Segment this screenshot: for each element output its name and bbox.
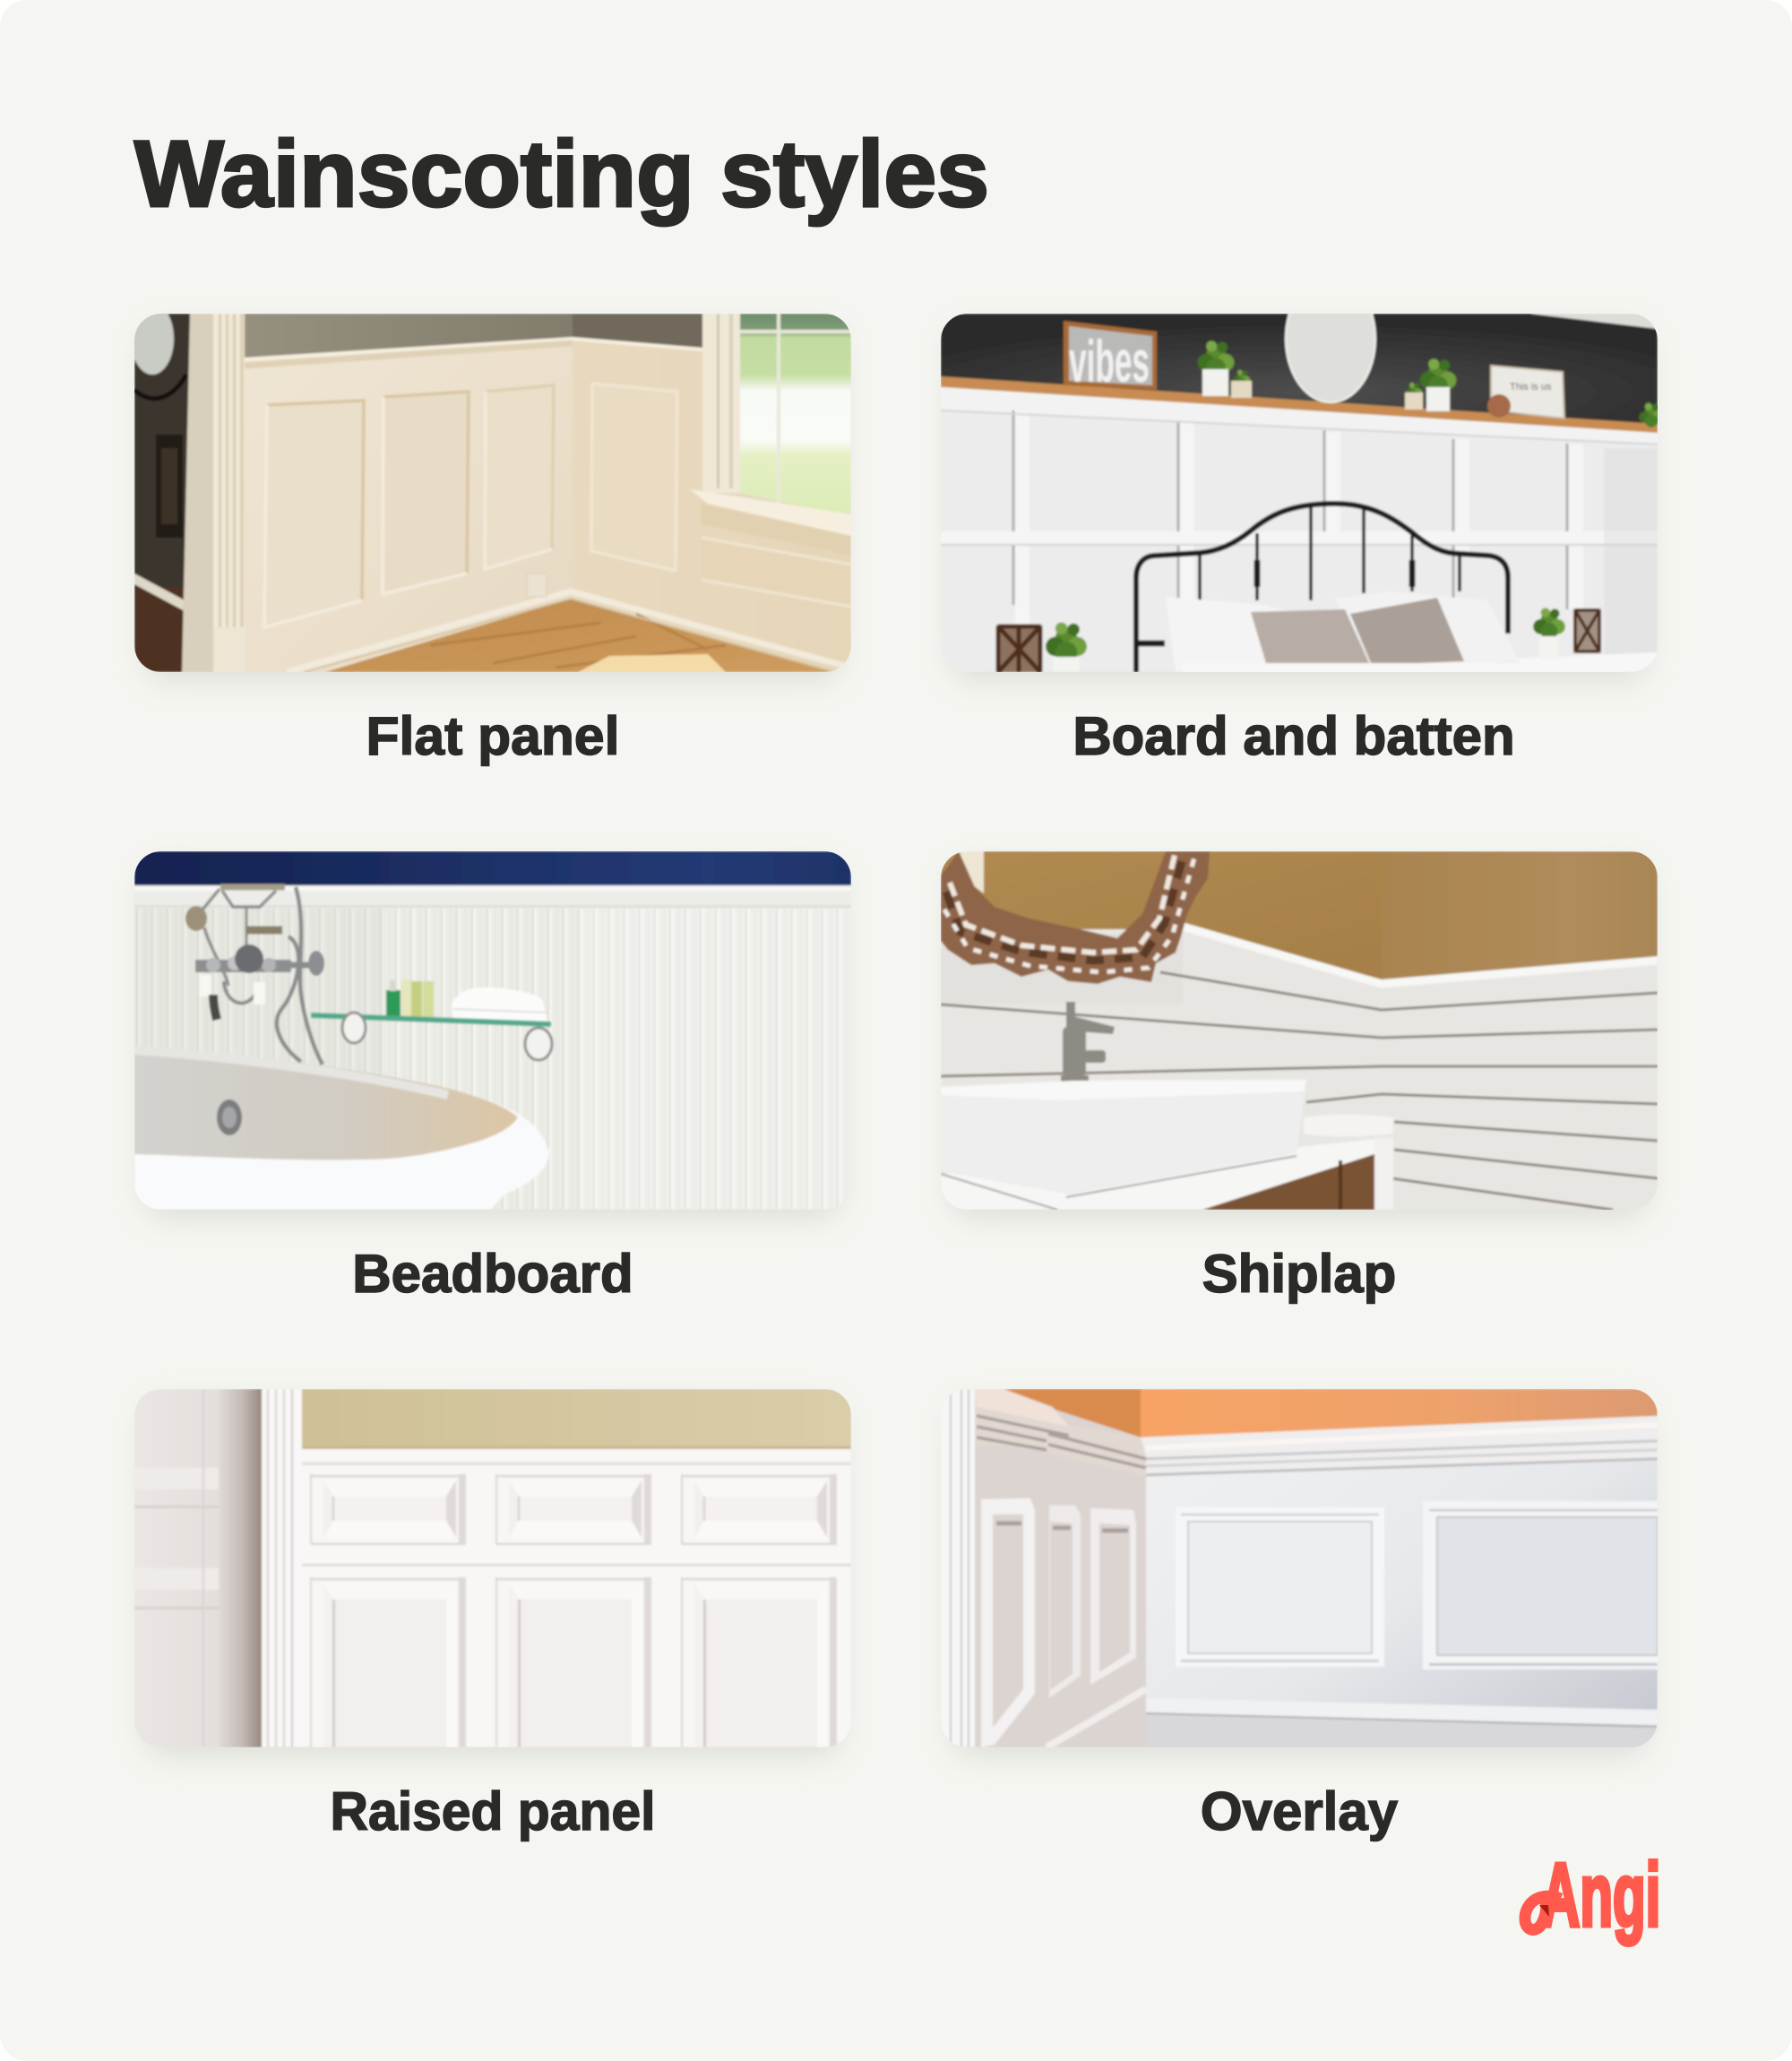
top wall band (943, 386, 1656, 434)
beadboard wall (134, 851, 851, 1210)
photo: flat panel wainscoting (131, 303, 851, 672)
batten grid (941, 409, 1658, 624)
cap rail (134, 885, 851, 909)
floor and baseboard (287, 591, 851, 672)
label: beadboard: Beadboard (352, 1244, 633, 1304)
photo: overlay wainscoting (941, 1389, 1665, 1751)
vibes sign (1064, 321, 1157, 394)
label: raised panel: Raised panel (330, 1781, 656, 1841)
toilet tank (1304, 1115, 1393, 1136)
label: board and batten: Board and batten (1073, 706, 1515, 766)
panel: flat panel (131, 303, 851, 766)
plants on shelf (1198, 341, 1664, 427)
framed sign: This is us (1510, 382, 1552, 392)
photo: beadboard wainscoting (134, 851, 851, 1210)
label: overlay: Overlay (1201, 1781, 1399, 1841)
white cap rail (1183, 927, 1658, 984)
glass shelf with toiletries (311, 979, 552, 1060)
label: shiplap: Shiplap (1202, 1244, 1396, 1304)
navy wall band (134, 851, 851, 885)
logo: Angi: Angi (1541, 1845, 1660, 1945)
faucet (185, 887, 324, 1065)
overlay panels, left wall (981, 1498, 1136, 1747)
lower rail, left wall (1047, 1689, 1146, 1747)
overlay panel A (1176, 1507, 1384, 1667)
lower rail (1146, 1698, 1658, 1751)
door shadow (219, 1389, 262, 1747)
recessed panels (264, 384, 851, 627)
nightstand, right lantern and plant (1514, 608, 1658, 672)
crown, left wall (975, 1389, 1146, 1476)
faucet (1061, 1002, 1115, 1083)
ornate mirror (941, 851, 1210, 984)
fluted casing (262, 1389, 302, 1747)
shiplap lines (941, 972, 1658, 1210)
overlay panel B (1423, 1501, 1665, 1669)
window (690, 314, 851, 556)
upper raised panels (310, 1474, 837, 1545)
orange upper wall (1004, 1389, 1658, 1437)
wall below mirror (941, 930, 1183, 1004)
pillar trim (182, 314, 245, 672)
panel: raised panel (134, 1389, 851, 1841)
panel: board and batten (941, 314, 1658, 756)
title: Wainscoting styles (134, 122, 989, 227)
vessel sink (941, 1080, 1306, 1210)
dark upper wall (941, 314, 1658, 426)
door (134, 1389, 219, 1747)
left wall (941, 1389, 1146, 1747)
chair rail (245, 339, 702, 366)
outlet (527, 573, 547, 597)
wooden shelf (941, 376, 1658, 433)
headboard (1136, 504, 1508, 672)
pillows (1176, 597, 1620, 672)
right shading (1605, 530, 1658, 543)
wall surfaces (245, 341, 851, 672)
left lantern and plant (996, 622, 1087, 672)
panel: shiplap (941, 851, 1658, 1304)
chair rail, right wall (1141, 1416, 1658, 1476)
photo: shiplap wainscoting (941, 851, 1658, 1210)
framed sign (1487, 366, 1564, 418)
round mirror (1283, 314, 1378, 405)
label: flat panel: Flat panel (366, 706, 620, 766)
panel: overlay (941, 1389, 1665, 1841)
rails (302, 1462, 851, 1566)
ceiling corner (1529, 314, 1658, 329)
vibes sign: vibes (1069, 328, 1150, 394)
bathtub (134, 1047, 548, 1210)
door (131, 303, 190, 672)
counter and cabinet (941, 1138, 1393, 1210)
upper wall (245, 314, 702, 358)
casing (941, 1389, 975, 1747)
photo: board and batten wainscoting (941, 314, 1658, 672)
lower raised panels (310, 1577, 837, 1747)
tan upper wall (302, 1389, 851, 1449)
right wall (1141, 1389, 1658, 1747)
gold upper walls (941, 851, 1658, 979)
panel: beadboard (134, 851, 851, 1304)
photo: raised panel wainscoting (134, 1389, 851, 1747)
